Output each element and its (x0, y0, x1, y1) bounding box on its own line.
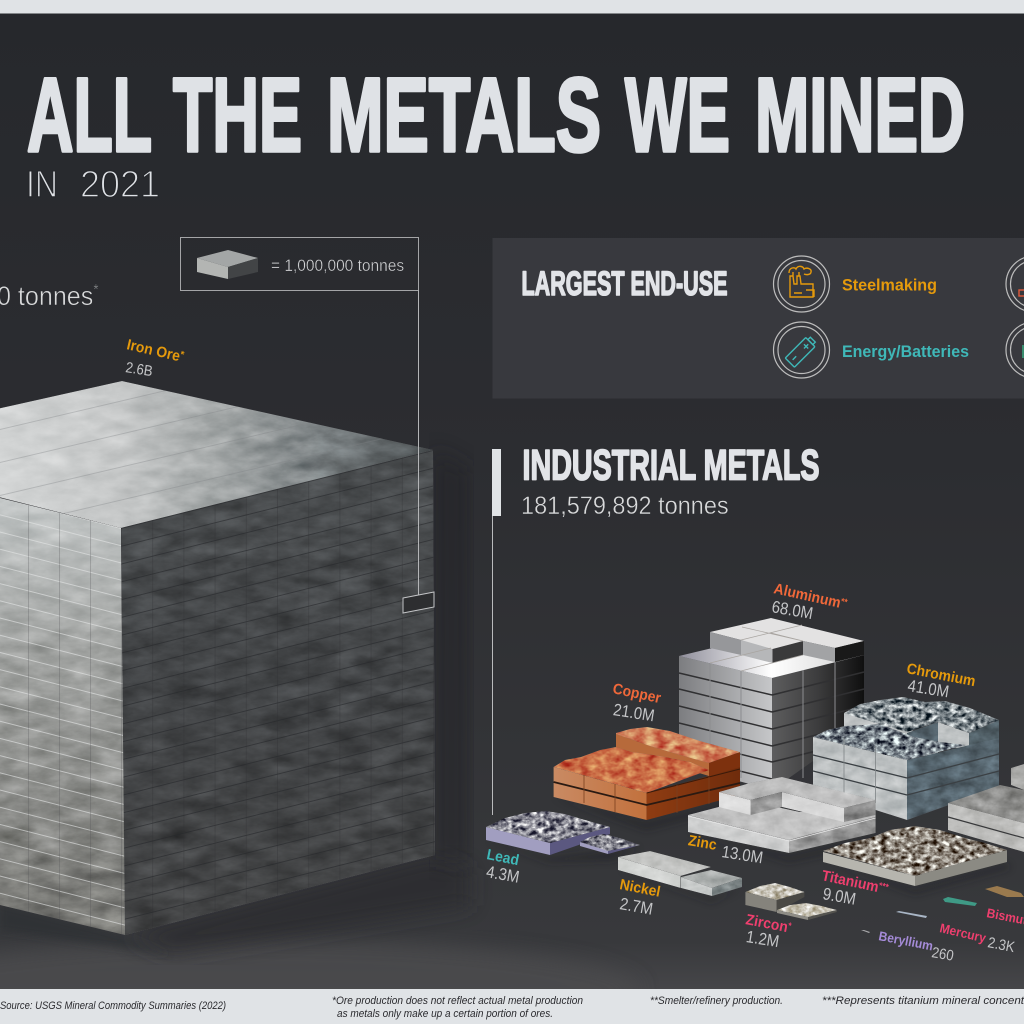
label: aluminum (770, 581, 849, 623)
icon: steelmaking (774, 256, 830, 312)
iron ore cube (0, 381, 435, 935)
label: titanium: Titanium (820, 868, 880, 896)
label: zinc: Zinc (687, 833, 718, 854)
footnote: titanium: ***Represents titanium mineral concent (822, 995, 1024, 1007)
floor light and shadows (0, 450, 640, 1024)
label: chromium: Chromium (905, 661, 977, 690)
titanium ore pile (823, 826, 1007, 876)
subtitle (26, 164, 160, 206)
title: WE (625, 57, 730, 174)
label: copper: Copper (611, 681, 663, 707)
copper ore piles (616, 727, 740, 763)
label: beryllium: 260 (930, 943, 955, 964)
label: energy batteries: Energy/Batteries (842, 342, 969, 361)
label: aluminum: ** (840, 596, 849, 607)
cube top face (0, 381, 433, 528)
floor shadows under metals (486, 797, 1010, 902)
footnote: ore production (332, 995, 583, 1020)
mercury sample (896, 911, 927, 918)
iron ore label: * (179, 349, 185, 361)
unlabeled stone stack at right edge (948, 764, 1024, 852)
label: zinc (687, 833, 764, 868)
colorful small sample (943, 897, 977, 906)
label: chromium: 41.0M (906, 677, 950, 702)
iron ore label (125, 337, 185, 379)
lead tray (486, 811, 640, 855)
section heading: industrial metals: 181,579,892 tonnes (521, 492, 729, 520)
label: lead (485, 847, 521, 887)
section heading: industrial metals: INDUSTRIAL METALS (522, 442, 820, 490)
top strip (0, 0, 1024, 14)
title (27, 57, 965, 174)
icon: one million tonne block (197, 250, 258, 279)
icon: partially visible end-use, bottom (1006, 322, 1024, 378)
title: METALS (327, 57, 601, 174)
label: nickel: 2.7M (618, 895, 654, 919)
label: zinc: 13.0M (720, 843, 764, 868)
panel: largest end-use (492, 238, 1024, 398)
subtitle: IN (26, 164, 58, 206)
cube left face (0, 498, 125, 935)
total tonnage text: * (93, 282, 99, 298)
label: copper (611, 681, 663, 726)
icon: partially visible end-use, top (1006, 256, 1024, 312)
title: THE (173, 57, 302, 174)
label: beryllium: Beryllium (877, 929, 934, 954)
icon: energy batteries (774, 322, 830, 378)
title: ALL (27, 57, 152, 174)
legend box (180, 238, 418, 290)
iron ore label: 2.6B (125, 358, 154, 379)
iron ore label: Iron Ore (125, 337, 182, 365)
section heading: industrial metals (492, 442, 820, 815)
lower tier faces (679, 656, 772, 790)
label: zircon: Zircon (744, 912, 789, 936)
label: aluminum: 68.0M (770, 598, 814, 623)
titanium tray (823, 826, 1007, 886)
zinc stack (688, 777, 876, 853)
footnote: ore production: *Ore production does not reflect actual metal production (332, 995, 583, 1007)
label: mercury (938, 921, 1017, 955)
zircon trays (745, 883, 837, 920)
bismuth sample (985, 886, 1024, 897)
subtitle: 2021 (80, 164, 160, 206)
copper tray (554, 727, 740, 820)
legend box: = 1,000,000 tonnes (271, 258, 404, 275)
footnote: smelter: **Smelter/refinery production. (650, 995, 783, 1007)
label: zircon: 1.2M (745, 928, 780, 951)
lead ore pile (486, 811, 610, 843)
legend leader line and highlighted block (403, 290, 434, 613)
panel heading: LARGEST END-USE (522, 265, 728, 303)
upper tier (710, 618, 864, 649)
footer (0, 989, 1024, 1024)
chromium ore piles (844, 697, 999, 733)
source: Source: USGS Mineral Commodity Summaries (2022) (0, 1000, 226, 1012)
label: nickel: Nickel (618, 877, 662, 901)
label: aluminum: Aluminum (772, 581, 842, 612)
label: titanium: 9.0M (821, 885, 857, 909)
label: nickel (618, 877, 662, 919)
chromium tray (813, 697, 999, 820)
beryllium sample (861, 930, 870, 933)
nickel plates (618, 851, 742, 896)
label: zircon (744, 912, 793, 951)
footnote: ore production: as metals only make up a certain portion of ores. (337, 1008, 553, 1020)
small lead tray (580, 834, 640, 854)
label: beryllium (877, 929, 955, 964)
label: titanium: *** (878, 880, 890, 892)
cube right face (121, 450, 435, 935)
label: copper: 21.0M (612, 701, 656, 726)
aluminum stack (679, 618, 864, 790)
label: lead: 4.3M (485, 863, 521, 887)
label: mercury: 2.3K (986, 933, 1017, 955)
label: lead: Lead (485, 847, 520, 869)
label: mercury: Mercury (938, 921, 987, 946)
label: zircon: * (787, 920, 793, 931)
label: titanium (820, 868, 890, 909)
label: steelmaking: Steelmaking (842, 276, 937, 294)
